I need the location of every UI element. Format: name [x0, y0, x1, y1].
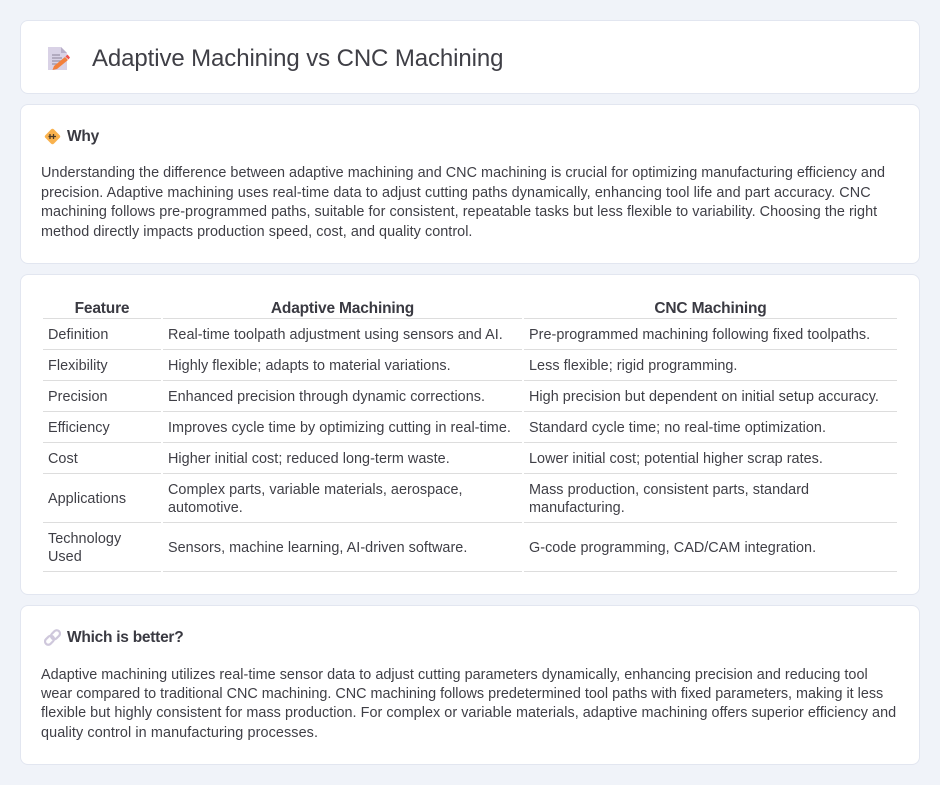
panel: comparison table [20, 274, 920, 595]
comparison table: Pre-programmed machining following fixed toolpaths. [529, 327, 870, 343]
comparison table: Less flexible; rigid programming. [529, 358, 737, 374]
comparison table: Adaptive Machining [271, 300, 414, 317]
text block: why explanation: machining follows pre-programmed paths, suitable for consistent, repeatable tasks but less flexible to variability. Choosing the right [41, 204, 877, 220]
text block: why explanation [41, 165, 885, 240]
comparison table: High precision but dependent on initial setup accuracy. [529, 389, 879, 405]
comparison table: Complex parts, variable materials, aerospace, [168, 482, 463, 498]
comparison table [43, 300, 897, 572]
text block: verdict: flexible but highly consistent for mass production. For complex or variable materials, adaptive machining offers superior efficiency and [41, 705, 896, 721]
comparison table: Applications [48, 491, 126, 507]
comparison table: Mass production, consistent parts, standard [529, 482, 809, 498]
text block: verdict: quality control in manufacturing processes. [41, 725, 318, 741]
comparison table: Highly flexible; adapts to material variations. [168, 358, 451, 374]
panel: title header [20, 20, 920, 94]
comparison table: Improves cycle time by optimizing cutting in real-time. [168, 420, 511, 436]
text block: verdict: Adaptive machining utilizes real-time sensor data to adjust cutting parameters dynamically, enhancing precision and reducing tool [41, 667, 868, 683]
panel: which is better [20, 605, 920, 765]
comparison table: G-code programming, CAD/CAM integration. [529, 540, 816, 556]
comparison table: Used [48, 549, 82, 565]
comparison table: Feature [75, 300, 129, 317]
comparison table: Flexibility [48, 358, 108, 374]
comparison table: manufacturing. [529, 500, 625, 516]
comparison table: Cost [48, 451, 78, 467]
title: Adaptive Machining vs CNC Machining [92, 45, 503, 72]
comparison table: Higher initial cost; reduced long-term waste. [168, 451, 450, 467]
comparison table: Definition [48, 327, 108, 343]
text block: verdict: wear compared to traditional CNC machining. CNC machining follows predetermined tool paths with fixed parameters, making it less [41, 686, 883, 702]
icon: chain link [44, 629, 61, 646]
comparison table: Sensors, machine learning, AI-driven software. [168, 540, 467, 556]
comparison table: Lower initial cost; potential higher scrap rates. [529, 451, 823, 467]
text block: why explanation: method directly impacts production speed, cost, and quality control. [41, 224, 472, 240]
text block: why explanation: precision. Adaptive machining uses real-time data to adjust cutting paths dynamically, enhancing tool life and part accuracy. CNC [41, 185, 871, 201]
comparison table: Efficiency [48, 420, 110, 436]
heading: which is better: Which is better? [67, 629, 183, 646]
panel: why [20, 104, 920, 264]
heading: why: Why [67, 128, 99, 145]
comparison table: CNC Machining [654, 300, 767, 317]
comparison table: Technology [48, 531, 121, 547]
icon: document with pencil [48, 47, 70, 70]
comparison table: Enhanced precision through dynamic corrections. [168, 389, 485, 405]
text block: verdict [41, 667, 896, 741]
comparison table: Standard cycle time; no real-time optimization. [529, 420, 826, 436]
text block: why explanation: Understanding the difference between adaptive machining and CNC machining is crucial for optimizing manufacturing efficiency and [41, 165, 885, 181]
comparison table: Real-time toolpath adjustment using sensors and AI. [168, 327, 503, 343]
icon: diamond warning sign [44, 128, 60, 144]
comparison table: automotive. [168, 500, 243, 516]
comparison table: Precision [48, 389, 108, 405]
